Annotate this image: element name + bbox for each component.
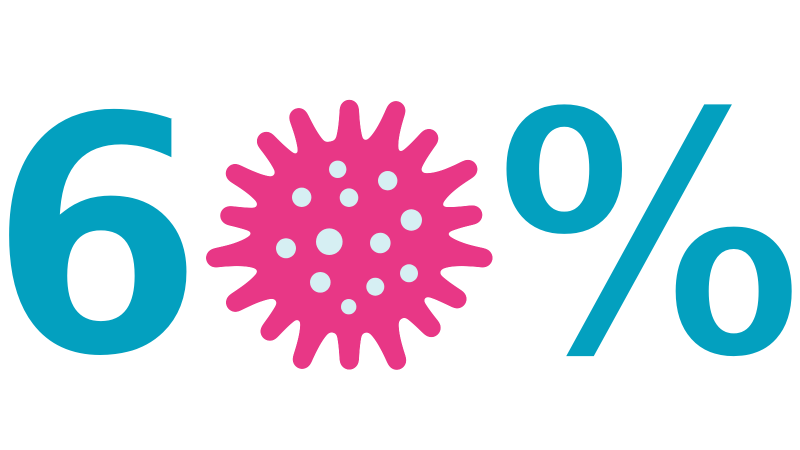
icon: virus [203, 95, 495, 376]
virus body and spikes [203, 95, 495, 376]
virus light dots [276, 161, 422, 314]
percent sign: % [494, 38, 800, 435]
